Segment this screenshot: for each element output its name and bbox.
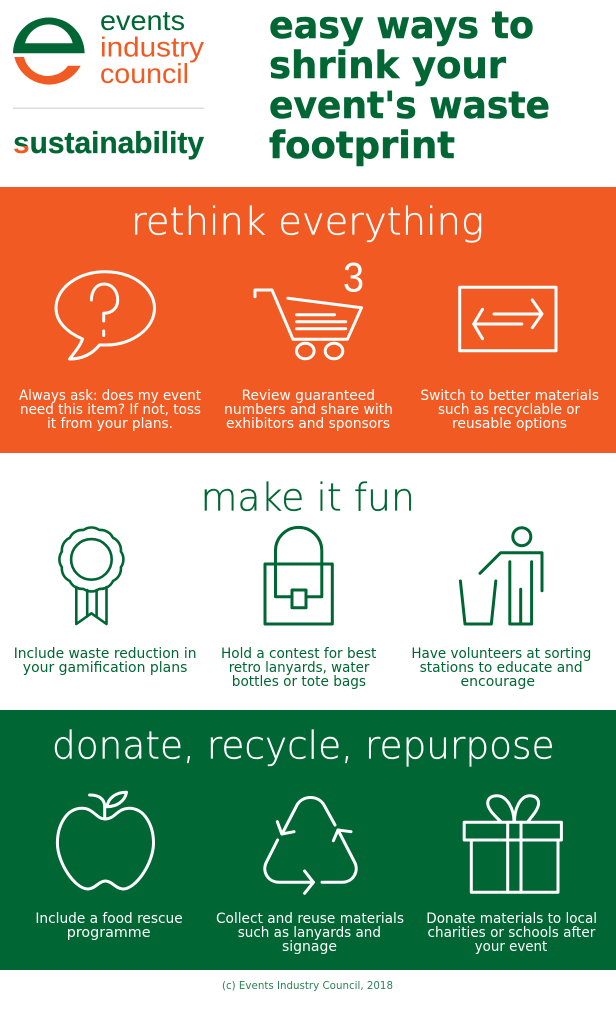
logo wordmark: events [100,5,185,36]
icon: shopping cart [255,290,362,359]
text: always ask: it from your plans. [47,416,173,432]
text: food rescue: Include a food rescue [35,911,183,927]
header [13,4,550,167]
heading: rethink everything: rethink everything [131,200,484,244]
panel: make it fun [0,453,616,710]
title: easy ways to [269,4,534,47]
text: review guaranteed: numbers and share with [224,402,393,418]
text: donate materials: Donate materials to local [426,911,597,927]
text: hold a contest: retro lanyards, water [229,660,370,676]
icon: recycling arrows [265,798,356,893]
text: have volunteers: stations to educate and [420,660,583,676]
text: hold a contest: Hold a contest for best [221,646,377,662]
text: include waste reduction: Include waste reduction in [14,646,197,662]
title [269,4,550,167]
text: donate materials [426,911,597,955]
icon: speech bubble with question mark [56,272,154,359]
text: have volunteers: Have volunteers at sorting [411,646,591,662]
logo wordmark [100,5,204,89]
heading: make it fun: make it fun [201,476,415,521]
text: always ask: need this item? If not, toss [20,402,201,418]
title: shrink your [269,44,507,87]
heading: donate, recycle, repurpose: donate, recycle, repurpose [52,723,554,768]
panel: rethink everything [0,187,616,453]
text: always ask: Always ask: does my event [19,388,201,404]
text: always ask [19,388,201,432]
icon: apple [57,792,154,889]
text: collect and reuse [216,911,404,955]
text: donate materials: your event [475,939,548,955]
sustainability label: sustainability [13,125,205,160]
footer credit: (c) Events Industry Council, 2018 [222,979,393,992]
text: switch to better materials: Switch to better materials [420,388,599,404]
panel: donate, recycle, repurpose [0,710,616,970]
logo: events industry council [13,5,204,89]
text: food rescue: programme [67,925,150,941]
text: have volunteers: encourage [460,674,535,690]
text: include waste reduction [14,646,197,676]
text: have volunteers [411,646,591,690]
text: review guaranteed [224,388,393,432]
logo wordmark: industry [100,32,204,62]
icon: gift box [464,796,561,892]
logo wordmark: council [100,58,189,89]
icon: person using bin [460,528,542,624]
icon: swap arrows in rectangle [460,287,556,351]
text: collect and reuse: such as lanyards and [238,925,381,941]
text: food rescue [35,911,183,941]
text: switch to better materials [420,388,599,432]
text: donate materials: charities or schools after [428,925,596,941]
title: event's waste [269,84,550,127]
text: collect and reuse: signage [282,939,337,955]
logo mark: e [13,18,85,85]
text: hold a contest: bottles or tote bags [232,674,366,690]
title: footprint [269,124,455,167]
text: collect and reuse: Collect and reuse materials [216,911,404,927]
text: switch to better materials: such as recyclable or [438,402,580,418]
text: review guaranteed: exhibitors and sponsors [226,416,390,432]
text: review guaranteed: Review guaranteed [242,388,375,404]
text: hold a contest [221,646,377,690]
icon: tote bag [265,527,332,624]
text: switch to better materials: reusable options [452,416,567,432]
icon: rosette ribbon [59,527,123,624]
text: include waste reduction: your gamification plans [23,660,187,676]
number 3: 3 [343,254,364,301]
